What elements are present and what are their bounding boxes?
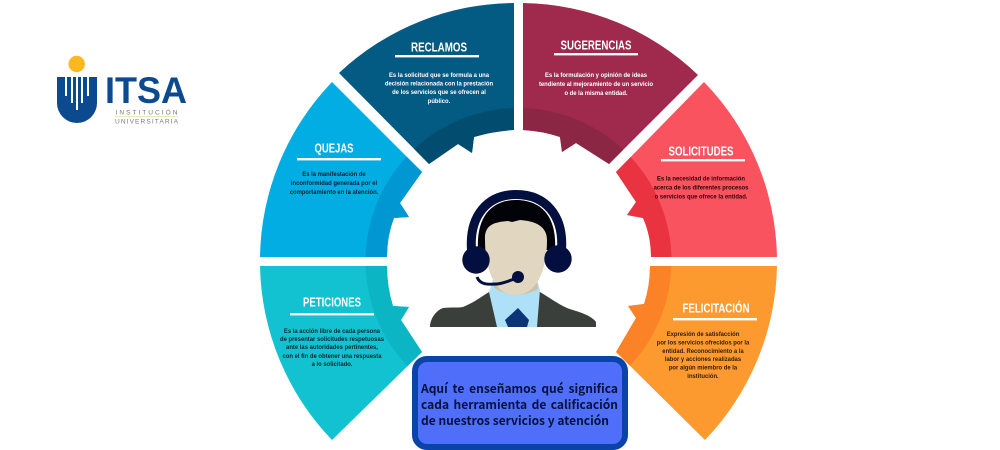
callout: blue message box: cada [421, 396, 449, 413]
text: quejas description: inconformidad generada por el [291, 180, 377, 187]
panel: sugerencias [523, 3, 698, 164]
callout: blue message box: nuestros [438, 412, 490, 429]
text: peticiones description [280, 328, 384, 368]
text: felicitacion description [657, 331, 750, 380]
text: peticiones description: Es la acción libre de cada persona [284, 328, 381, 335]
text: solicitudes description: acerca de los diferentes procesos [654, 184, 749, 192]
callout: blue message box [412, 356, 628, 450]
panel: reclamos [339, 3, 514, 164]
text: reclamos description [385, 72, 493, 105]
text: felicitacion description: por los servicios ofrecidos por la [657, 339, 750, 347]
text: felicitacion description: entidad. Reconocimiento a la [662, 348, 744, 355]
callout: blue message box: de [421, 412, 436, 429]
face [485, 220, 547, 295]
callout: blue message box: herramienta [454, 396, 527, 413]
text: sugerencias description: tendiente al mejoramiento de un servicio [539, 81, 653, 88]
text: reclamos description: decisión relacionada con la prestación [385, 80, 493, 88]
logo subtitle: INSTITUCIÓN [116, 108, 178, 116]
panel: felicitacion [616, 266, 777, 440]
callout: blue message box: atención [557, 412, 609, 429]
text: solicitudes description: o servicios que ofrece la entidad. [655, 193, 748, 201]
panel: solicitudes [616, 82, 777, 257]
logo wordmark: ITSA [105, 70, 187, 111]
text: felicitacion description: Expresión de satisfacción [667, 331, 739, 338]
text: reclamos description: Es la solicitud que se formula a una [389, 72, 489, 79]
heading: felicitacion: FELICITACIÓN [682, 300, 750, 316]
text: felicitacion description: por algún miembro de la [669, 364, 738, 372]
text: quejas description: Es la manifestación de [302, 171, 366, 178]
text: solicitudes description: Es la necesidad de información [657, 175, 745, 183]
text: sugerencias description: Es la formulación y opinión de ideas [545, 72, 647, 79]
hair [478, 200, 555, 250]
tie [505, 308, 529, 327]
headband [471, 194, 562, 250]
logo: ITSA [57, 56, 187, 125]
callout: blue message box: qué [541, 380, 564, 397]
text: felicitacion description: labor y acciones realizadas [665, 356, 742, 363]
text: peticiones description: a lo solicitado. [312, 361, 353, 368]
heading: solicitudes: SOLICITUDES [668, 144, 734, 158]
text: sugerencias description: o de la misma entidad. [564, 90, 628, 97]
panel: quejas [260, 82, 422, 257]
callout: blue message box: te [453, 380, 464, 397]
callout: blue message box: servicios [493, 412, 545, 429]
ear cup left [462, 246, 490, 274]
callout: blue message box: y [548, 412, 555, 429]
callout: blue message box: enseñamos [469, 380, 536, 397]
text: quejas description: comportamiento en la atención. [290, 189, 379, 196]
text: reclamos description: de los servicios que se ofrecen al [392, 89, 486, 96]
text: solicitudes description [654, 175, 749, 201]
ear cup right [544, 245, 572, 273]
shirt collar [489, 280, 540, 327]
neck [494, 280, 538, 295]
jacket [430, 292, 596, 327]
panel: peticiones [260, 266, 422, 440]
icon: logo sun [68, 56, 85, 72]
text: reclamos description: público. [428, 98, 451, 105]
microphone head [512, 271, 524, 283]
microphone boom [477, 277, 517, 284]
text: sugerencias description [539, 72, 653, 97]
heading: reclamos: RECLAMOS [411, 40, 467, 54]
callout: blue message box: de [532, 396, 546, 413]
callout: blue message box: Aquí [421, 380, 448, 397]
text: felicitacion description: institución. [687, 373, 719, 380]
callout: blue message box: calificación [551, 396, 618, 413]
logo subtitle: UNIVERSITARIA [115, 118, 179, 126]
logo subtitle [115, 108, 179, 126]
icon: logo shield [57, 77, 97, 123]
callout: blue message box: significa [569, 380, 618, 397]
icon: agent with headset [430, 194, 596, 327]
text: quejas description [290, 171, 379, 196]
text: peticiones description: ante las autoridades pertinentes, [286, 344, 378, 351]
text: peticiones description: de presentar solicitudes respetuosas [280, 336, 384, 343]
heading: peticiones: PETICIONES [303, 296, 361, 310]
heading: quejas: QUEJAS [314, 142, 354, 156]
heading: sugerencias: SUGERENCIAS [560, 38, 632, 52]
text: peticiones description: con el fin de obtener una respuesta [282, 353, 382, 360]
